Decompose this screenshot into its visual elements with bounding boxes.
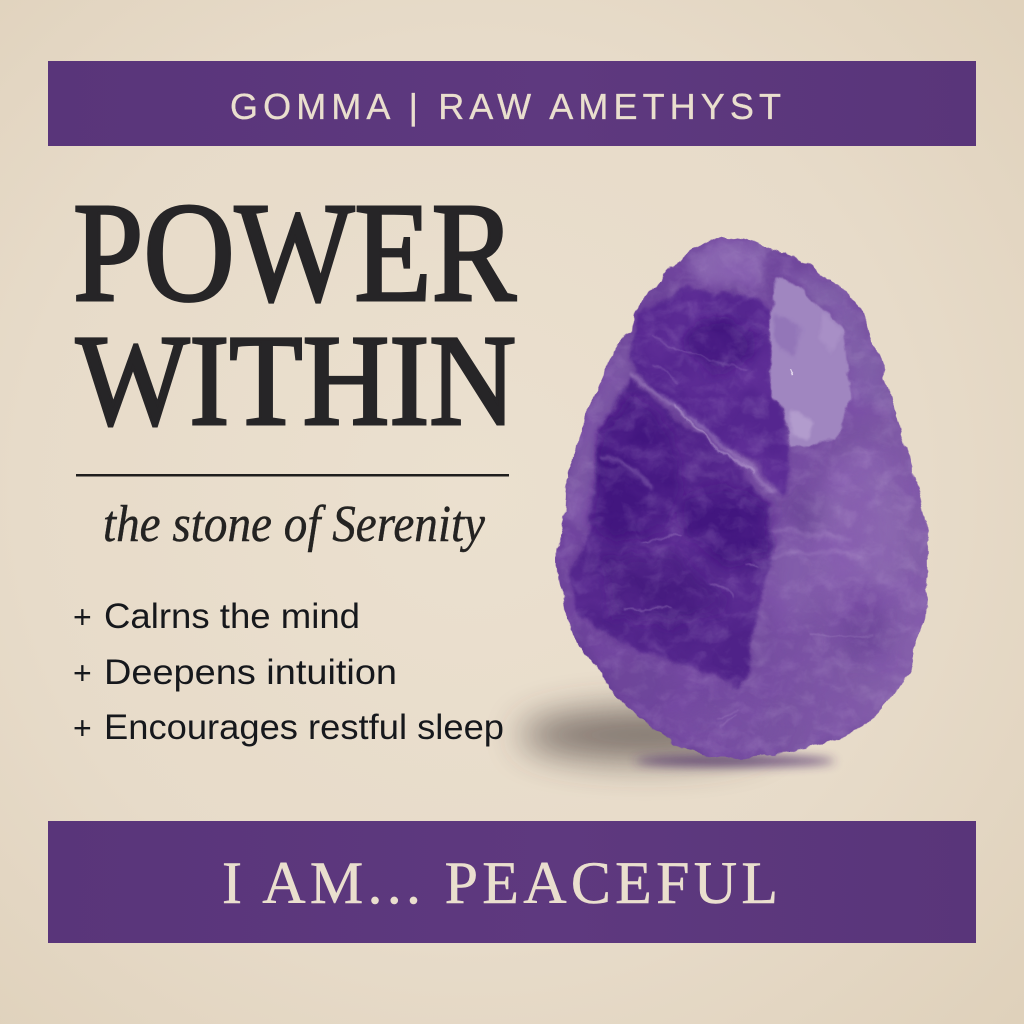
lower dark face [570,377,773,687]
affirmation band [48,821,976,943]
upper dark face [630,290,792,495]
benefit 1: + [73,599,92,635]
title [73,173,516,453]
benefit 3: Encourages restful sleep [104,708,504,747]
divider rule [76,474,509,476]
benefit 1: Calrns the mind [104,597,360,636]
subtitle: the stone of Serenity [103,496,486,553]
bottom edge shade [573,634,854,748]
darkest patches [590,320,770,623]
raw amethyst stone [555,236,929,760]
header band [48,61,976,146]
stone shadow [520,709,835,767]
upper left rim [565,331,633,530]
light facet [767,277,852,447]
benefit 2: + [73,655,92,691]
affirmation text: I AM... PEACEFUL [222,850,778,916]
benefit 2: Deepens intuition [104,653,397,692]
top pale cap [685,238,883,400]
header text: GOMMA | RAW AMETHYST [230,86,781,127]
title: POWER [73,173,516,331]
benefits list [73,597,504,747]
mottled texture [556,268,927,667]
crack highlights [603,338,873,727]
benefit 3: + [73,710,92,746]
title: WITHIN [76,309,516,453]
lower right glow [760,448,900,662]
